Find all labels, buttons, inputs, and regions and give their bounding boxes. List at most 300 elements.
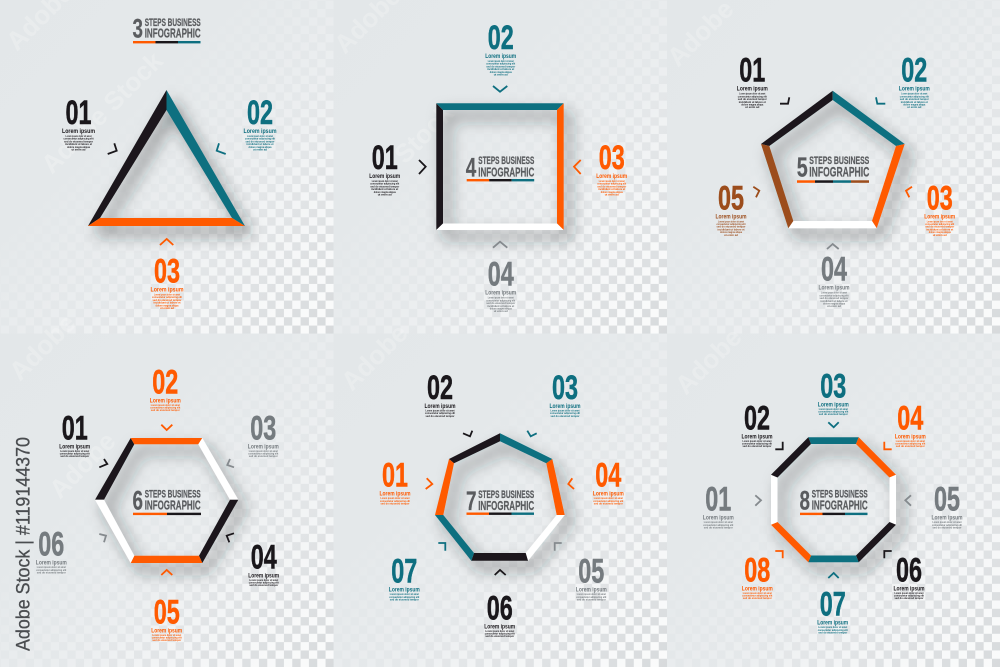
callout 01: consectetur adipiscing elit bbox=[738, 94, 767, 98]
heading: 7 steps bbox=[466, 486, 535, 516]
callout 06: 06 bbox=[38, 526, 64, 564]
watermarks: Stock bbox=[388, 98, 460, 169]
callout 06: Lorem ipsum bbox=[36, 561, 67, 567]
panel: 7 steps heptagon bbox=[380, 369, 624, 638]
callout 01: sed do eiusmod tempor bbox=[380, 502, 410, 506]
callout 01: dolore magna aliqua bbox=[374, 190, 396, 194]
callout 07: consectetur adipiscing elit bbox=[389, 595, 419, 599]
callout 01: sed do eiusmod tempor bbox=[704, 526, 734, 530]
watermarks bbox=[0, 0, 747, 504]
callout 03: Lorem ipsum bbox=[248, 444, 279, 450]
callout 01: Lorem ipsum dolor sit amet bbox=[60, 449, 89, 453]
callout 01: sed do eiusmod tempor bbox=[370, 184, 400, 188]
chart: octagon frame bbox=[771, 437, 896, 562]
callout 04: 04 bbox=[595, 457, 621, 495]
callout 01: Lorem ipsum bbox=[380, 492, 410, 498]
arrow 04 bbox=[227, 533, 234, 542]
callout 01: ut enim ad bbox=[378, 192, 392, 196]
callout 01: consectetur adipiscing elit bbox=[703, 523, 733, 527]
arrow 03 bbox=[828, 422, 839, 427]
callout 01: 01 bbox=[382, 457, 408, 495]
callout 07: consectetur adipiscing elit bbox=[818, 628, 848, 632]
callout 02: Lorem ipsum bbox=[150, 398, 181, 404]
callout 06: Lorem ipsum dolor sit amet bbox=[485, 629, 514, 633]
arrow 03 bbox=[527, 431, 537, 436]
callout 04: 04 bbox=[251, 538, 277, 576]
callout 03: dolore magna aliqua bbox=[929, 230, 951, 234]
callout 02: 02 bbox=[247, 94, 273, 132]
arrow 03 bbox=[227, 459, 234, 467]
arrow 06 bbox=[884, 551, 892, 558]
callout 02: sed do eiusmod tempor bbox=[486, 64, 516, 68]
callout 04: sed do eiusmod tempor bbox=[486, 301, 516, 305]
callout 02: Lorem ipsum dolor sit amet bbox=[742, 439, 772, 443]
callout 04 bbox=[895, 399, 926, 448]
callout 03: consectetur adipiscing elit bbox=[597, 182, 626, 186]
heading: 4 steps: STEPS BUSINESS bbox=[478, 155, 534, 167]
callout 06 bbox=[894, 551, 924, 600]
chart: square frame bbox=[436, 103, 564, 230]
callout 07: Lorem ipsum dolor sit amet bbox=[818, 625, 847, 629]
callout 01: Lorem ipsum bbox=[737, 87, 768, 93]
callout 02: dolore magna aliqua bbox=[903, 102, 926, 106]
callout 05: consectetur adipiscing elit bbox=[932, 523, 962, 527]
arrow 02 bbox=[876, 97, 885, 104]
callout 03: Lorem ipsum dolor sit amet bbox=[927, 219, 953, 223]
watermarks: Adobe bbox=[43, 426, 121, 504]
callout 06: consectetur adipiscing elit bbox=[485, 631, 515, 635]
callout 06 bbox=[36, 526, 67, 575]
callout 07: Lorem ipsum dolor sit amet bbox=[390, 592, 419, 596]
callout 03: 03 bbox=[927, 179, 953, 217]
callout 02: Lorem ipsum dolor sit amet bbox=[901, 92, 927, 96]
callout 07 bbox=[817, 586, 848, 635]
callout 07: Lorem ipsum bbox=[817, 621, 848, 627]
callout 08: consectetur adipiscing elit bbox=[742, 593, 772, 597]
callout 01: 01 bbox=[705, 481, 731, 519]
callout 03: sed do eiusmod tempor bbox=[597, 184, 627, 188]
callout 07 bbox=[389, 553, 420, 602]
callout 02: Lorem ipsum bbox=[244, 129, 276, 135]
chart: heptagon frame bbox=[435, 433, 565, 561]
callout 03: sed do eiusmod tempor bbox=[819, 412, 849, 416]
callout 02 bbox=[485, 19, 516, 76]
callout 03: dolore magna aliqua bbox=[156, 303, 179, 307]
callout 05: 05 bbox=[578, 553, 604, 591]
arrow 01 bbox=[419, 160, 426, 174]
callout 03: sed do eiusmod tempor bbox=[249, 454, 279, 458]
callout 08: Lorem ipsum bbox=[742, 586, 773, 592]
callout 07: sed do eiusmod tempor bbox=[390, 598, 420, 602]
callout 04: Lorem ipsum bbox=[895, 434, 926, 440]
callout 06: sed do eiusmod tempor bbox=[894, 596, 924, 600]
callout 04: Lorem ipsum bbox=[593, 492, 624, 498]
callout 07: Lorem ipsum bbox=[389, 588, 420, 594]
panel: 5 steps pentagon bbox=[716, 52, 955, 308]
callout 06: sed do eiusmod tempor bbox=[37, 571, 67, 575]
callout 03: Lorem ipsum bbox=[818, 402, 849, 408]
callout 03: dolore magna aliqua bbox=[601, 190, 623, 194]
arrow 01 bbox=[99, 459, 107, 467]
callout 03: consectetur adipiscing elit bbox=[152, 295, 182, 299]
callout 05: consectetur adipiscing elit bbox=[716, 222, 746, 226]
arrow 02 bbox=[775, 442, 783, 449]
callout 05: Lorem ipsum dolor sit amet bbox=[577, 592, 606, 596]
callout 02: consectetur adipiscing elit bbox=[150, 405, 180, 409]
callout 03 bbox=[818, 367, 849, 416]
heading: 3 steps bbox=[132, 14, 201, 44]
callout 03: Lorem ipsum bbox=[550, 404, 580, 410]
callout 02 bbox=[424, 369, 456, 418]
callout 05: sed do eiusmod tempor bbox=[577, 598, 607, 602]
callout 05: 05 bbox=[718, 179, 744, 217]
callout 03 bbox=[550, 369, 580, 418]
callout 04: Lorem ipsum bbox=[818, 286, 850, 292]
callout 03 bbox=[596, 139, 627, 196]
callout 03: Lorem ipsum dolor sit amet bbox=[819, 407, 848, 411]
callout 04: Lorem ipsum dolor sit amet bbox=[896, 439, 925, 443]
callout 04: dolore magna aliqua bbox=[823, 302, 845, 306]
callout 04 bbox=[818, 251, 850, 308]
callout 05: Lorem ipsum dolor sit amet bbox=[932, 520, 962, 524]
callout 06: Lorem ipsum dolor sit amet bbox=[37, 565, 66, 569]
callout 01: Lorem ipsum dolor sit amet bbox=[380, 496, 410, 500]
heading: 6 steps: STEPS BUSINESS bbox=[145, 488, 201, 500]
callout 02 bbox=[150, 363, 181, 412]
callout 01: 01 bbox=[62, 409, 88, 447]
callout 03: Lorem ipsum dolor sit amet bbox=[599, 179, 625, 183]
callout 01: consectetur adipiscing elit bbox=[60, 451, 90, 455]
arrow 01 bbox=[780, 97, 789, 104]
heading: 4 steps: INFOGRAPHIC bbox=[478, 165, 535, 180]
callout 04: 04 bbox=[488, 256, 514, 294]
callout 04 bbox=[593, 457, 624, 506]
callout 04: incididunt ut labore et bbox=[487, 304, 514, 308]
callout 04 bbox=[248, 538, 279, 587]
callout 01: incididunt ut labore et bbox=[65, 142, 92, 146]
callout 02: Lorem ipsum bbox=[424, 404, 456, 410]
callout 04 bbox=[485, 256, 516, 313]
callout 04: consectetur adipiscing elit bbox=[895, 441, 925, 445]
heading: 6 steps: 6 bbox=[132, 486, 143, 516]
callout 02: consectetur adipiscing elit bbox=[245, 137, 275, 141]
callout 02: incididunt ut labore et bbox=[246, 142, 274, 146]
arrow 06 bbox=[495, 570, 506, 575]
callout 02: consectetur adipiscing elit bbox=[742, 441, 772, 445]
callout 03: incididunt ut labore et bbox=[154, 301, 181, 305]
callout 03: Lorem ipsum dolor sit amet bbox=[550, 408, 580, 412]
watermarks: Adobe bbox=[3, 308, 81, 386]
callout 01: Lorem ipsum dolor sit amet bbox=[704, 520, 733, 524]
watermarks: Adobe Stock bbox=[35, 45, 169, 179]
callout 07: 07 bbox=[820, 586, 846, 624]
callout 05: Lorem ipsum bbox=[932, 516, 962, 522]
callout 08: Lorem ipsum dolor sit amet bbox=[743, 591, 772, 595]
heading: 3 steps: 3 bbox=[132, 14, 143, 44]
callout 02: 02 bbox=[427, 369, 453, 407]
callout 01: ut enim ad bbox=[72, 148, 86, 152]
panel: 4 steps square bbox=[369, 19, 627, 313]
callout 06: Lorem ipsum dolor sit amet bbox=[894, 591, 924, 595]
callout 04: Lorem ipsum bbox=[485, 291, 516, 297]
callout 04: consectetur adipiscing elit bbox=[486, 298, 515, 302]
callout 02: Lorem ipsum dolor sit amet bbox=[247, 134, 273, 138]
arrow 07 bbox=[828, 573, 839, 578]
heading: 8 steps: STEPS BUSINESS bbox=[812, 488, 868, 500]
callout 02: Lorem ipsum bbox=[899, 87, 930, 93]
callout 05: consectetur adipiscing elit bbox=[576, 595, 606, 599]
heading: 4 steps: 4 bbox=[466, 153, 476, 183]
panel: 3 steps triangle bbox=[62, 14, 276, 310]
callout 02 bbox=[742, 399, 772, 448]
callout 01: sed do eiusmod tempor bbox=[64, 139, 94, 143]
arrow 01 bbox=[426, 478, 432, 489]
callout 05: Lorem ipsum bbox=[716, 214, 746, 220]
callout 05: 05 bbox=[934, 481, 960, 519]
heading: 5 steps: 5 bbox=[797, 152, 808, 183]
arrow 04 bbox=[827, 244, 839, 249]
heading: 3 steps: INFOGRAPHIC bbox=[145, 26, 201, 41]
callout 04: sed do eiusmod tempor bbox=[594, 502, 624, 506]
callout 05: sed do eiusmod tempor bbox=[152, 638, 182, 642]
panel: 6 steps hexagon bbox=[36, 363, 279, 642]
callout 04: consectetur adipiscing elit bbox=[593, 499, 623, 503]
callout 02: sed do eiusmod tempor bbox=[426, 414, 455, 418]
callout 04: Lorem ipsum dolor sit amet bbox=[594, 496, 623, 500]
arrow 04 bbox=[568, 478, 574, 489]
callout 02: 02 bbox=[488, 19, 514, 57]
callout 01: incididunt ut labore et bbox=[739, 100, 766, 104]
heading: 6 steps: INFOGRAPHIC bbox=[145, 498, 201, 513]
callout 03: Lorem ipsum bbox=[150, 288, 184, 294]
callout 05 bbox=[716, 179, 746, 237]
callout 05: ut enim ad bbox=[724, 233, 738, 237]
callout 01: Lorem ipsum bbox=[59, 444, 90, 450]
arrow 03 bbox=[160, 239, 173, 245]
callout 08: 08 bbox=[744, 551, 770, 589]
callout 02: sed do eiusmod tempor bbox=[900, 97, 930, 101]
callout 05: sed do eiusmod tempor bbox=[716, 225, 746, 229]
callout 01: consectetur adipiscing elit bbox=[370, 182, 399, 186]
arrow 03 bbox=[906, 187, 912, 197]
watermarks: Adobe bbox=[669, 322, 747, 400]
callout 02: Lorem ipsum dolor sit amet bbox=[151, 403, 180, 407]
callout 05: Lorem ipsum dolor sit amet bbox=[152, 633, 181, 637]
callout 01: sed do eiusmod tempor bbox=[60, 454, 90, 458]
arrow 05 bbox=[905, 495, 911, 506]
callout 02: sed do eiusmod tempor bbox=[246, 139, 275, 143]
callout 04: incididunt ut labore et bbox=[820, 299, 848, 303]
arrow 02 bbox=[161, 425, 172, 430]
callout 05 bbox=[151, 593, 182, 642]
callout 02: 02 bbox=[901, 52, 927, 90]
callout 02: sed do eiusmod tempor bbox=[742, 444, 772, 448]
callout 06: 06 bbox=[487, 589, 513, 627]
callout 03: ut enim ad bbox=[933, 233, 947, 237]
callout 03: sed do eiusmod tempor bbox=[152, 298, 182, 302]
arrow 04 bbox=[884, 442, 892, 449]
callout 02: 02 bbox=[152, 363, 178, 401]
callout 01: Lorem ipsum dolor sit amet bbox=[372, 179, 398, 183]
callout 03: consectetur adipiscing elit bbox=[550, 411, 580, 415]
callout 03: Lorem ipsum bbox=[596, 174, 627, 180]
callout 04: ut enim ad bbox=[827, 304, 841, 308]
heading: 8 steps: 8 bbox=[800, 486, 810, 516]
callout 02 bbox=[899, 52, 930, 109]
callout 03: sed do eiusmod tempor bbox=[925, 225, 955, 229]
callout 03: Lorem ipsum bbox=[924, 214, 955, 220]
arrow 05 bbox=[161, 570, 172, 575]
callout 03: consectetur adipiscing elit bbox=[925, 222, 954, 226]
callout 01 bbox=[59, 409, 90, 458]
callout 05: Lorem ipsum bbox=[576, 588, 607, 594]
callout 01: 01 bbox=[739, 52, 765, 90]
arrow 02 bbox=[217, 143, 226, 154]
callout 06: Lorem ipsum bbox=[894, 586, 924, 592]
heading: 8 steps bbox=[800, 486, 868, 516]
panel: 8 steps octagon bbox=[703, 367, 962, 635]
callout 03 bbox=[150, 252, 184, 310]
callout 04: Lorem ipsum dolor sit amet bbox=[488, 296, 514, 300]
callout 01: Lorem ipsum dolor sit amet bbox=[739, 92, 765, 96]
callout 01 bbox=[703, 481, 734, 530]
callout 01: 01 bbox=[66, 94, 92, 132]
callout 06: sed do eiusmod tempor bbox=[485, 634, 515, 638]
callout 01: incididunt ut labore et bbox=[371, 187, 398, 191]
callout 03: 03 bbox=[599, 139, 625, 177]
heading: 5 steps bbox=[797, 152, 869, 183]
callout 01: dolore magna aliqua bbox=[741, 102, 764, 106]
arrow 01 bbox=[108, 143, 117, 154]
callout 06: Lorem ipsum bbox=[484, 624, 515, 630]
callout 02: Lorem ipsum dolor sit amet bbox=[426, 408, 455, 412]
arrow 07 bbox=[438, 543, 445, 551]
callout 05: dolore magna aliqua bbox=[720, 230, 742, 234]
callout 03: consectetur adipiscing elit bbox=[248, 451, 278, 455]
callout 02: consectetur adipiscing elit bbox=[900, 94, 929, 98]
callout 01 bbox=[62, 94, 95, 152]
callout 07: 07 bbox=[391, 553, 417, 591]
callout 01: Lorem ipsum bbox=[703, 516, 734, 522]
arrow 06 bbox=[99, 534, 106, 542]
callout 04: Lorem ipsum dolor sit amet bbox=[249, 578, 278, 582]
heading: 5 steps: INFOGRAPHIC bbox=[809, 165, 869, 180]
callout 01: ut enim ad bbox=[745, 105, 760, 109]
callout 05: 05 bbox=[154, 593, 180, 631]
callout 07: sed do eiusmod tempor bbox=[818, 631, 848, 635]
callout 04: 04 bbox=[821, 251, 847, 289]
callout 04: sed do eiusmod tempor bbox=[820, 296, 849, 300]
callout 04: sed do eiusmod tempor bbox=[896, 444, 926, 448]
heading: 7 steps: STEPS BUSINESS bbox=[478, 489, 534, 501]
callout 03: 03 bbox=[820, 367, 846, 405]
callout 02: ut enim ad bbox=[494, 72, 508, 76]
callout 01: Lorem ipsum dolor sit amet bbox=[66, 134, 92, 138]
callout 03: consectetur adipiscing elit bbox=[818, 409, 848, 413]
callout 03: ut enim ad bbox=[605, 192, 619, 196]
callout 01: consectetur adipiscing elit bbox=[380, 499, 410, 503]
callout 04: consectetur adipiscing elit bbox=[249, 580, 279, 584]
callout 02: Lorem ipsum dolor sit amet bbox=[488, 59, 514, 63]
callout 04: 04 bbox=[897, 399, 923, 437]
callout 06: consectetur adipiscing elit bbox=[36, 568, 66, 572]
callout 03: Lorem ipsum dolor sit amet bbox=[249, 449, 278, 453]
callout 01 bbox=[737, 52, 768, 109]
callout 02: ut enim ad bbox=[253, 148, 267, 152]
callout 02: 02 bbox=[744, 399, 770, 437]
callout 03 bbox=[248, 409, 279, 458]
callout 03: 03 bbox=[250, 409, 276, 447]
arrow 01 bbox=[755, 495, 761, 506]
heading: 4 steps bbox=[466, 153, 535, 183]
callout 01: Lorem ipsum bbox=[62, 129, 95, 135]
callout 05: Lorem ipsum dolor sit amet bbox=[718, 219, 744, 223]
heading: 6 steps bbox=[132, 486, 201, 516]
callout 04: dolore magna aliqua bbox=[490, 307, 512, 311]
callout 01: dolore magna aliqua bbox=[67, 145, 90, 149]
heading: 5 steps: STEPS BUSINESS bbox=[809, 155, 869, 167]
callout 01: consectetur adipiscing elit bbox=[64, 137, 94, 141]
callout 05: incididunt ut labore et bbox=[718, 227, 745, 231]
arrow 03 bbox=[574, 160, 581, 174]
callout 03: incididunt ut labore et bbox=[598, 187, 625, 191]
callout 02: consectetur adipiscing elit bbox=[425, 411, 455, 415]
callout 02: dolore magna aliqua bbox=[248, 145, 272, 149]
arrow 08 bbox=[775, 551, 783, 558]
watermarks: Adobe bbox=[335, 318, 413, 396]
stock id vertical text: Adobe Stock | #119144370 bbox=[14, 437, 34, 651]
callout 05: Lorem ipsum bbox=[151, 628, 182, 634]
callout 02: consectetur adipiscing elit bbox=[486, 62, 515, 66]
callout 02 bbox=[244, 94, 276, 152]
arrow 02 bbox=[493, 86, 507, 92]
callout 02: Lorem ipsum bbox=[742, 434, 772, 440]
callout 03: Lorem ipsum dolor sit amet bbox=[154, 292, 180, 296]
callout 02: incididunt ut labore et bbox=[901, 100, 928, 104]
callout 01: sed do eiusmod tempor bbox=[738, 97, 768, 101]
callout 03 bbox=[924, 179, 955, 237]
callout 06 bbox=[484, 589, 515, 638]
callout 03: 03 bbox=[552, 369, 578, 407]
callout 05: consectetur adipiscing elit bbox=[152, 635, 182, 639]
arrow 04 bbox=[493, 242, 507, 248]
callout 02: dolore magna aliqua bbox=[490, 70, 512, 74]
callout 02: ut enim ad bbox=[907, 105, 922, 109]
callout 03: 03 bbox=[154, 252, 180, 290]
callout 01: Lorem ipsum bbox=[369, 174, 400, 180]
callout 02: incididunt ut labore et bbox=[487, 67, 514, 71]
callout 01 bbox=[369, 139, 400, 196]
chart: pentagon frame bbox=[761, 91, 905, 228]
callout 05 bbox=[576, 553, 607, 602]
callout 04: ut enim ad bbox=[494, 309, 508, 313]
chart: hexagon frame bbox=[95, 438, 238, 563]
callout 08: sed do eiusmod tempor bbox=[743, 596, 773, 600]
callout 05: sed do eiusmod tempor bbox=[932, 526, 962, 530]
chart: triangle frame bbox=[88, 90, 245, 226]
callout 06: 06 bbox=[896, 551, 922, 589]
callout 06: consectetur adipiscing elit bbox=[894, 593, 924, 597]
heading: 7 steps: INFOGRAPHIC bbox=[478, 498, 535, 513]
heading: 7 steps: 7 bbox=[466, 486, 476, 516]
callout 08 bbox=[742, 551, 773, 600]
heading: 8 steps: INFOGRAPHIC bbox=[812, 498, 868, 513]
callout 02: sed do eiusmod tempor bbox=[151, 408, 181, 412]
callout 03: sed do eiusmod tempor bbox=[550, 414, 580, 418]
callout 05 bbox=[932, 481, 962, 530]
arrow 05 bbox=[555, 543, 562, 551]
heading: 3 steps: STEPS BUSINESS bbox=[145, 17, 201, 29]
